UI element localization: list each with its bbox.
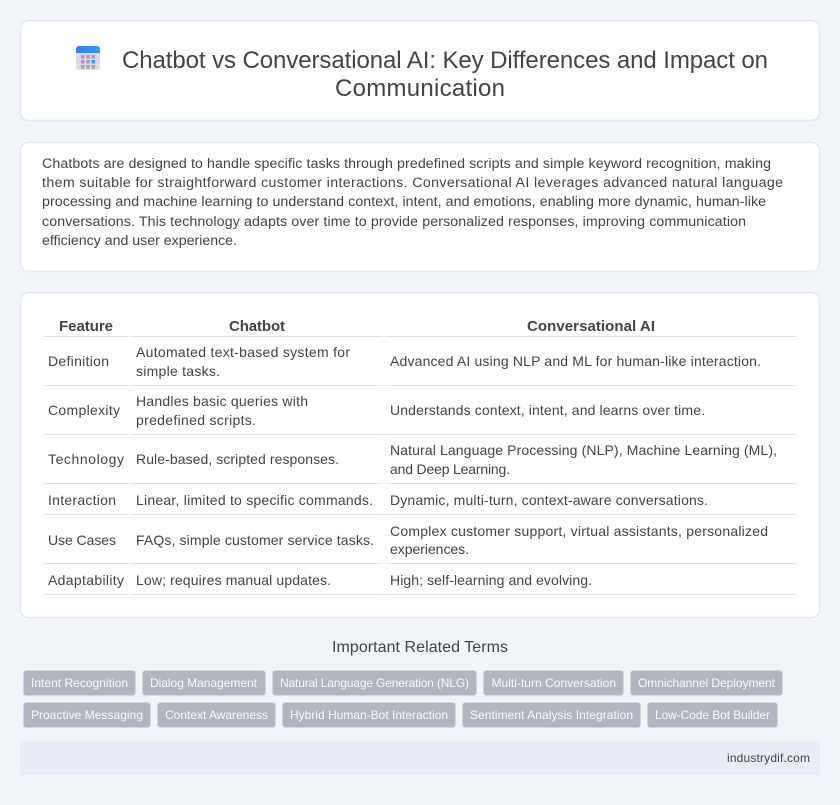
tag [282,702,456,728]
row: technology [48,442,777,477]
row: use cases: FAQs, simple customer service tasks. [136,532,374,548]
panel: intro text: them suitable for straightforward customer interactions. Conversational AI leverages advanced natural language [42,175,783,191]
row: adaptability: Low; requires manual updates. [136,572,331,588]
row: definition: Definition [48,353,109,369]
row: definition [48,344,761,379]
row: definition: simple tasks. [136,363,220,379]
title: Communication [335,75,505,102]
row: technology: and Deep Learning. [390,461,510,477]
table header: Conversational AI [527,318,655,335]
row: technology: Rule-based, scripted responses. [136,451,339,467]
row: use cases: Complex customer support, virtual assistants, personalized [390,523,768,539]
row: technology: Natural Language Processing (NLP), Machine Learning (ML), [390,442,777,458]
tag: Context Awareness [165,708,268,722]
tag [648,702,778,728]
heading: related terms: Important Related Terms [332,639,508,656]
panel: intro text: conversations. This technology adapts over time to provide personalized responses, improving communication [42,214,746,230]
tag: Natural Language Generation (NLG) [280,676,469,690]
row: interaction: Dynamic, multi-turn, context-aware conversations. [390,492,708,508]
tag: Intent Recognition [31,676,128,690]
row: adaptability [48,572,592,588]
row: interaction: Interaction [48,492,116,508]
tag [24,702,150,728]
table header [59,318,655,335]
row: adaptability: Adaptability [48,572,124,588]
tag [24,670,136,696]
tag [630,670,782,696]
row: adaptability: High; self-learning and evolving. [390,572,592,588]
tag [142,670,266,696]
panel: header [20,20,820,120]
row: use cases: experiences. [390,541,469,557]
table header: Feature [59,318,113,335]
row: technology: Technology [48,451,124,467]
row: complexity: Understands context, intent, and learns over time. [390,402,705,418]
row: definition: Advanced AI using NLP and ML for human-like interaction. [390,353,761,369]
title: Chatbot vs Conversational AI: Key Differences and Impact on [122,47,768,74]
tag: Sentiment Analysis Integration [470,708,633,722]
row: interaction: Linear, limited to specific commands. [136,492,373,508]
tag: Hybrid Human-Bot Interaction [290,708,448,722]
panel: intro text: processing and machine learning to understand context, intent, and emotions, enabling more dynamic, human-like [42,194,766,210]
icon: calendar [76,46,100,70]
row: complexity [48,393,705,428]
tag [484,670,624,696]
row: definition: Automated text-based system for [136,344,350,360]
panel: comparison table [20,292,820,618]
panel: intro text: Chatbots are designed to handle specific tasks through predefined scripts and simple keyword recognition, making [42,156,771,172]
panel: intro text [20,142,820,272]
row: complexity: Handles basic queries with [136,393,308,409]
tag: Dialog Management [150,676,258,690]
row: use cases: Use Cases [48,532,116,548]
footer [20,741,820,775]
footer: industrydif.com [727,751,810,765]
row: interaction [48,492,708,508]
tag [272,670,476,696]
tag: Multi-turn Conversation [492,676,616,690]
row: complexity: Complexity [48,402,120,418]
tag [158,702,276,728]
tag: Proactive Messaging [31,708,143,722]
title [122,47,768,102]
tag group: related terms [24,670,782,728]
row: use cases [48,523,768,557]
panel: intro text: efficiency and user experience. [42,233,237,249]
tag [462,702,640,728]
table header: Chatbot [229,318,285,335]
tag: Low-Code Bot Builder [655,708,770,722]
row: complexity: predefined scripts. [136,412,256,428]
tag: Omnichannel Deployment [638,676,776,690]
